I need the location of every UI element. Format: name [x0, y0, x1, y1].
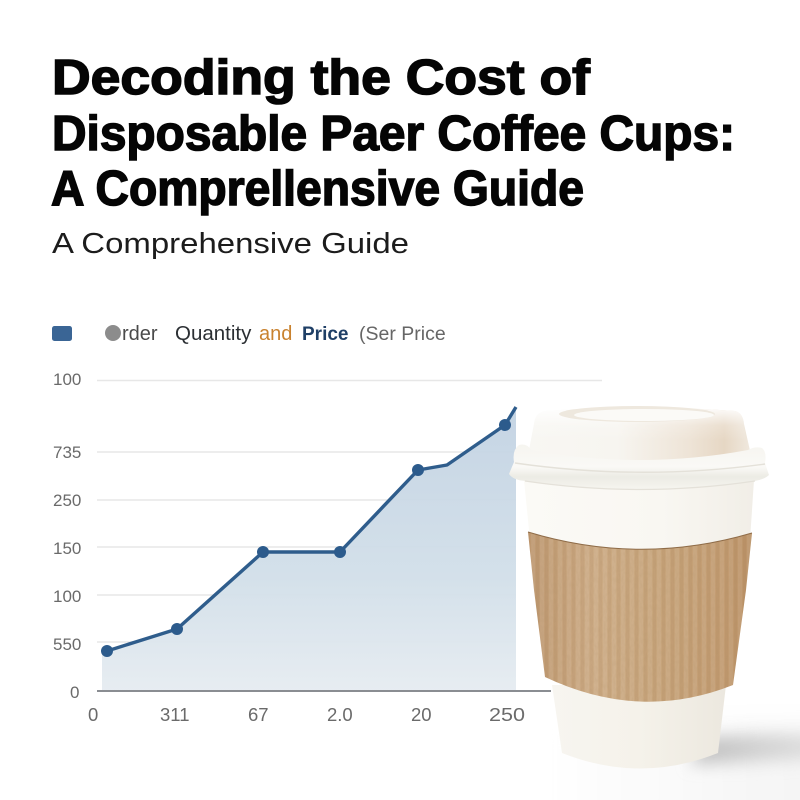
cardboard sleeve: [528, 532, 752, 702]
x axis labels: 311: [160, 704, 190, 725]
x axis labels: 67: [248, 704, 269, 725]
title: [51, 51, 735, 216]
x axis labels: 250: [489, 704, 525, 725]
legend label: and: [259, 323, 292, 345]
grid lines: [97, 380, 602, 642]
lid rim: [509, 445, 769, 490]
subtitle: A Comprehensive Guide: [52, 228, 409, 260]
cup shadow: [690, 734, 800, 764]
legend label: (Ser Price: [359, 323, 446, 345]
sleeve top edge: [528, 532, 752, 549]
area fill: [102, 407, 516, 690]
lid highlight: [532, 408, 746, 440]
cup base: [552, 685, 726, 768]
y axis labels: [53, 370, 81, 702]
floor shading: [540, 725, 800, 800]
y axis labels: 100: [53, 370, 81, 389]
title: Decoding the Cost of: [52, 51, 591, 105]
data points: [101, 419, 511, 657]
title: Disposable Paer Coffee Cups:: [52, 107, 735, 161]
y axis labels: 550: [53, 635, 81, 654]
lid dome: [528, 408, 751, 462]
data line: [107, 407, 516, 651]
x axis line: [97, 690, 551, 692]
x axis labels: [88, 704, 525, 725]
cup body: [524, 480, 754, 552]
legend swatch: grey: [105, 325, 121, 341]
y axis labels: 150: [53, 539, 81, 558]
icon: coffee cup: [509, 406, 800, 768]
lid recess: [559, 406, 715, 422]
y axis labels: 100: [53, 587, 81, 606]
x axis labels: 0: [88, 704, 98, 725]
y axis labels: 0: [70, 683, 79, 702]
legend label: rder: [122, 323, 158, 345]
legend label: Price: [302, 324, 348, 345]
x axis labels: 2.0: [327, 704, 353, 725]
title: A Comprellensive Guide: [51, 162, 584, 216]
chart legend: [52, 322, 446, 345]
line chart: [53, 370, 602, 725]
legend label: Quantity: [175, 322, 252, 345]
y axis labels: 250: [53, 491, 81, 510]
y axis labels: 735: [53, 443, 81, 462]
rim groove: [515, 463, 765, 472]
legend swatch: blue: [52, 326, 72, 341]
x axis labels: 20: [411, 704, 432, 725]
